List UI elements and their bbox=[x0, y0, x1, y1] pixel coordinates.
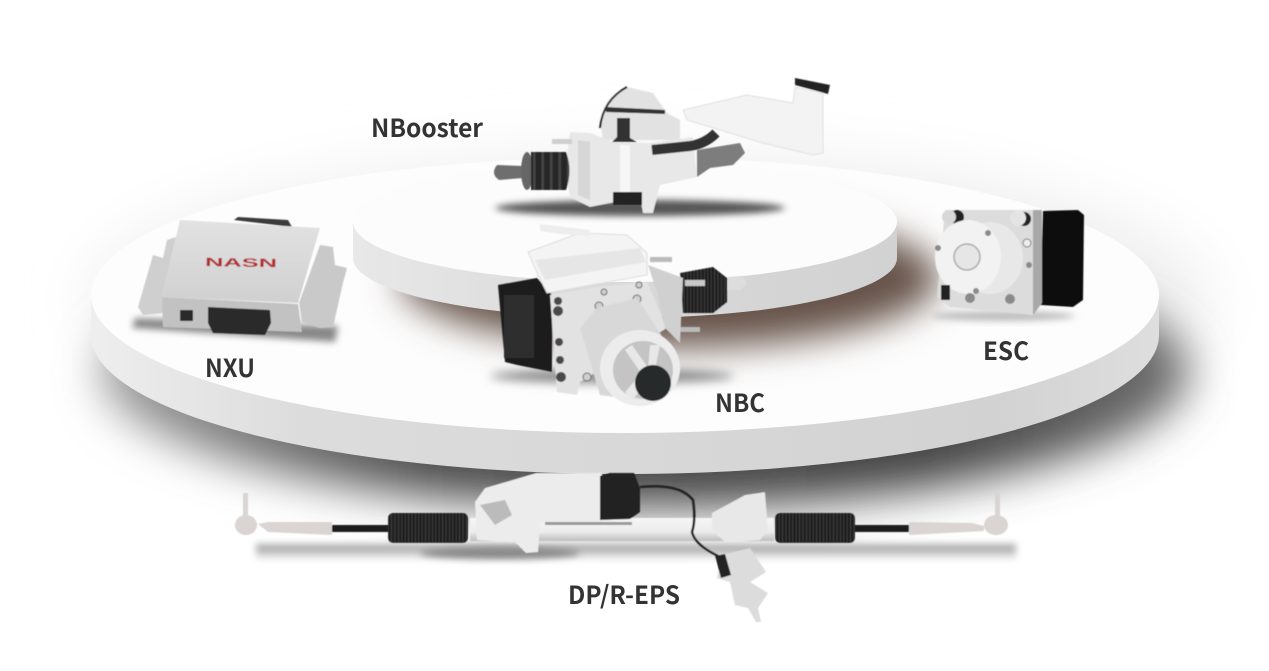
black cover bbox=[1040, 210, 1084, 307]
bracket bbox=[648, 265, 683, 343]
steering column bbox=[717, 548, 768, 622]
cable bbox=[640, 486, 718, 556]
pinion housing bbox=[712, 492, 768, 542]
left tie rod bbox=[332, 525, 388, 532]
left tie rod end bbox=[235, 493, 332, 535]
upper disc top face bbox=[353, 162, 897, 282]
lower connector bbox=[613, 192, 642, 205]
dome bbox=[600, 87, 680, 140]
product: NXU bbox=[132, 217, 347, 342]
shadow of upper disc on large disc bbox=[400, 208, 940, 348]
column connector bbox=[715, 554, 731, 578]
vacuum hose bbox=[652, 133, 716, 150]
large disc top face bbox=[91, 157, 1159, 433]
clevis bbox=[494, 165, 523, 180]
NBC ground shadow bbox=[490, 369, 734, 383]
motor housing bbox=[475, 473, 602, 553]
ports bbox=[935, 230, 1032, 304]
top connector bbox=[234, 217, 292, 227]
main connector bbox=[208, 307, 271, 335]
motor cylinder bbox=[935, 220, 1001, 294]
housing top bbox=[162, 220, 320, 303]
product: DP/R-EPS bbox=[235, 473, 1016, 622]
right tie rod end bbox=[909, 493, 1008, 535]
valve plate bbox=[550, 282, 667, 395]
product: NBC bbox=[490, 224, 747, 406]
NBooster ground shadow bbox=[495, 200, 785, 216]
push rod boot bbox=[531, 152, 570, 190]
small port bbox=[180, 310, 193, 321]
plate holes bbox=[553, 297, 566, 382]
motor ECU bbox=[600, 473, 640, 520]
valve block bbox=[937, 210, 1033, 315]
right flange bbox=[299, 245, 347, 328]
reservoir filler bbox=[540, 224, 590, 236]
large disc side bbox=[91, 196, 1159, 474]
rack slot bbox=[545, 522, 632, 525]
housing front bbox=[162, 297, 302, 332]
label: DP/R-EPS: DP/R-EPS bbox=[568, 576, 680, 612]
push rod flange bbox=[521, 152, 533, 190]
mounting stud bbox=[552, 139, 572, 144]
push rod bbox=[685, 280, 705, 286]
mounting bolts bbox=[583, 282, 642, 381]
large platform disc bbox=[90, 155, 1210, 508]
reservoir cap bbox=[795, 78, 830, 94]
reservoir bbox=[528, 233, 647, 293]
pump housing bbox=[957, 222, 1023, 294]
label: NXU: NXU bbox=[205, 349, 255, 385]
end bell bbox=[600, 330, 680, 406]
valve body bbox=[565, 132, 697, 213]
spokes bbox=[625, 345, 660, 400]
upper platform disc bbox=[353, 162, 940, 348]
label: NBooster: NBooster bbox=[371, 109, 483, 145]
product: ESC bbox=[931, 210, 1084, 321]
housing recess bbox=[480, 500, 512, 525]
upper disc side bbox=[353, 198, 897, 318]
rack tube bbox=[470, 518, 774, 541]
motor centre bbox=[954, 244, 980, 270]
dome strap bbox=[605, 107, 665, 114]
NXU ground shadow bbox=[132, 318, 338, 342]
EPS ground shadow bbox=[256, 544, 1016, 563]
black connector bbox=[498, 278, 552, 372]
label: NBC: NBC bbox=[715, 384, 765, 420]
fluid reservoir bbox=[683, 87, 823, 155]
left flange bbox=[138, 237, 176, 315]
ESC ground shadow bbox=[931, 311, 1075, 321]
label: ESC: ESC bbox=[983, 332, 1029, 368]
shadow under large disc bbox=[90, 155, 1210, 445]
motor cone bbox=[580, 298, 670, 400]
product: NBooster bbox=[494, 78, 830, 216]
right tie rod bbox=[855, 525, 909, 532]
rear bolt rods bbox=[650, 257, 672, 262]
master cylinder bbox=[697, 143, 745, 177]
right boot bbox=[775, 513, 855, 543]
cap bbox=[635, 365, 671, 401]
NASN logo: NASN bbox=[205, 255, 277, 270]
clevis bbox=[728, 276, 747, 290]
left boot bbox=[388, 513, 468, 543]
bolts bbox=[950, 210, 964, 224]
block side bbox=[1033, 210, 1042, 315]
push rod boot bbox=[680, 267, 727, 313]
